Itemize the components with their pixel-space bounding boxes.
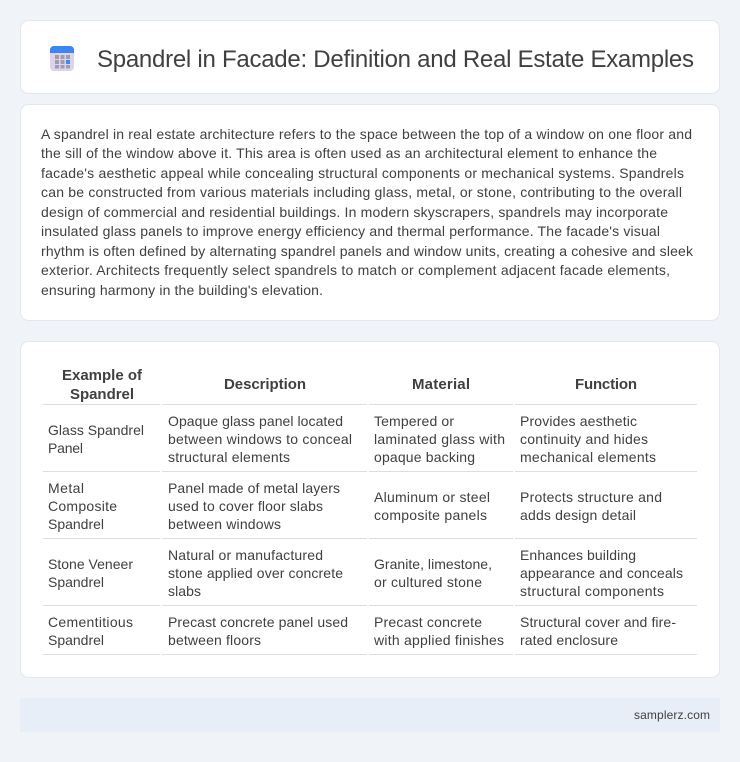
table row: metal composite spandrel: adds design detail	[520, 507, 636, 523]
table row: metal composite spandrel: Protects structure and	[520, 489, 662, 505]
table header row: Material	[412, 376, 470, 393]
table row: stone veneer spandrel: Granite, limestone,	[374, 556, 492, 572]
table row: cementitious spandrel: rated enclosure	[520, 632, 618, 648]
table row: stone veneer spandrel: appearance and conceals	[520, 565, 683, 581]
table row: stone veneer spandrel: Natural or manufactured	[168, 547, 323, 563]
table row: stone veneer spandrel: slabs	[168, 583, 201, 599]
definition paragraph: can be constructed from various materials including glass, metal, or stone, contributing to the overall	[41, 184, 682, 200]
panel: definition text	[20, 104, 720, 320]
table row: cementitious spandrel: Spandrel	[48, 632, 104, 648]
table row: glass spandrel panel: laminated glass with	[374, 431, 505, 447]
table row: glass spandrel panel: continuity and hides	[520, 431, 648, 447]
definition paragraph: facade's aesthetic appeal while concealing structural components or mechanical systems. Spandrels	[41, 165, 684, 181]
definition paragraph: A spandrel in real estate architecture refers to the space between the top of a window on one floor and	[41, 126, 692, 142]
table row: metal composite spandrel: Composite	[48, 498, 117, 514]
definition paragraph: ensuring harmony in the building's elevation.	[41, 282, 323, 298]
table row: glass spandrel panel: opaque backing	[374, 449, 475, 465]
table row: stone veneer spandrel: Stone Veneer	[48, 556, 133, 572]
table row: stone veneer spandrel: Enhances building	[520, 547, 636, 563]
table row: metal composite spandrel: Spandrel	[48, 516, 104, 532]
table row: cementitious spandrel: with applied finishes	[373, 632, 504, 648]
table row: metal composite spandrel	[43, 480, 697, 538]
table row: stone veneer spandrel: Spandrel	[48, 574, 104, 590]
icon: calendar grid	[50, 46, 74, 71]
table row: stone veneer spandrel: or cultured stone	[374, 574, 482, 590]
footer bar	[20, 698, 720, 732]
table row: cementitious spandrel: Precast concrete	[374, 614, 482, 630]
table row: cementitious spandrel: Precast concrete panel used	[168, 614, 348, 630]
definition paragraph: insulated glass panels to improve energy efficiency and thermal performance. The facade's visual	[41, 223, 660, 239]
table row: metal composite spandrel: between windows	[168, 516, 281, 532]
table row: stone veneer spandrel: stone applied over concrete	[168, 565, 343, 581]
table row: glass spandrel panel: between windows to conceal	[168, 431, 352, 447]
definition paragraph: exterior. Architects frequently select spandrels to match or complement adjacent facade elements,	[41, 262, 670, 278]
table row: glass spandrel panel: Provides aesthetic	[520, 413, 637, 429]
table header row: Spandrel	[70, 386, 134, 403]
table row: metal composite spandrel: used to cover floor slabs	[168, 498, 323, 514]
table row: glass spandrel panel: Opaque glass panel located	[168, 413, 343, 429]
header panel	[20, 20, 720, 94]
table row: stone veneer spandrel	[43, 547, 697, 606]
table row: glass spandrel panel	[43, 413, 697, 472]
table header row	[43, 367, 697, 404]
table row: metal composite spandrel: composite panels	[374, 507, 487, 523]
table row: stone veneer spandrel: structural components	[520, 583, 664, 599]
table row: glass spandrel panel: mechanical elements	[520, 449, 656, 465]
panel: spandrel examples table	[20, 342, 720, 678]
table row: glass spandrel panel: Tempered or	[374, 413, 454, 429]
definition paragraph: the sill of the window above it. This area is often used as an architectural element to enhance the	[41, 145, 657, 161]
definition paragraph: design of commercial and residential buildings. In modern skyscrapers, spandrels may incorporate	[41, 204, 668, 220]
table row: glass spandrel panel: Glass Spandrel	[48, 422, 144, 438]
table row: metal composite spandrel: Panel made of metal layers	[168, 480, 340, 496]
table row: cementitious spandrel	[43, 614, 697, 654]
table row: glass spandrel panel: structural elements	[168, 449, 290, 465]
table row: glass spandrel panel: Panel	[48, 440, 83, 456]
definition paragraph	[41, 126, 694, 298]
title: Spandrel in Facade: Definition and Real Estate Examples	[97, 46, 694, 73]
footer source text: samplerz.com	[634, 708, 710, 722]
table row: cementitious spandrel: Cementitious	[48, 614, 133, 630]
table header row: Description	[224, 376, 306, 393]
table header row: Function	[575, 376, 637, 393]
table header row: Example of	[62, 367, 143, 384]
table row: metal composite spandrel: Metal	[48, 480, 84, 496]
table row: cementitious spandrel: between floors	[168, 632, 261, 648]
table row: metal composite spandrel: Aluminum or steel	[374, 489, 490, 505]
definition paragraph: rhythm is often defined by alternating spandrel panels and window units, creating a cohesive and sleek	[41, 243, 694, 259]
table row: cementitious spandrel: Structural cover and fire-	[520, 614, 676, 630]
